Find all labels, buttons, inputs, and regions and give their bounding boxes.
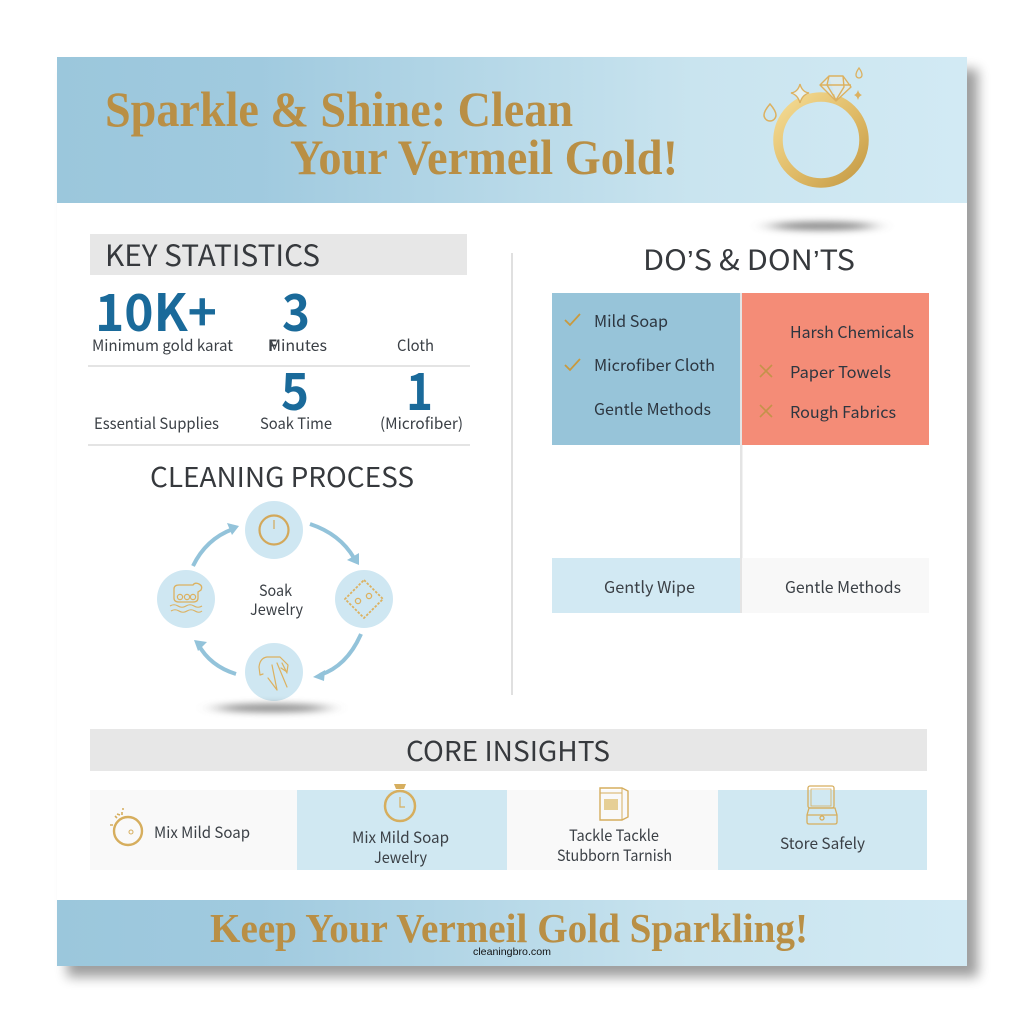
center label: soak jewelry [250, 579, 303, 620]
cross icon [760, 365, 772, 377]
stat: 3 minutes: 3 [282, 272, 310, 346]
center label: soak jewelry: Jewelry [250, 598, 303, 620]
panel: do's and don'ts [552, 239, 929, 613]
icon: gold ring with diamond [764, 68, 864, 183]
stat: 10K+: Minimum gold karat [92, 334, 233, 356]
step: hand wiping [245, 643, 303, 701]
card background [57, 57, 967, 966]
insight: mix mild soap [90, 790, 297, 870]
heading: cleaning process: CLEANING PROCESS [150, 455, 414, 495]
center label: soak jewelry: Soak [259, 579, 292, 601]
panel: cleaning process [150, 455, 414, 712]
card shadow [67, 69, 978, 977]
ring shadow [770, 222, 874, 230]
insight: mix mild soap: Mix Mild Soap [154, 821, 250, 843]
stat: 3 minutes: F [268, 334, 277, 356]
cell: gently wipe: Gently Wipe [604, 574, 695, 598]
insight: tackle stubborn tarnish: Tackle Tackle [569, 824, 659, 846]
icon: stopwatch [385, 784, 415, 821]
item: mild soap: Mild Soap [594, 308, 668, 332]
stat: 1 microfiber [380, 351, 463, 434]
stat: 1 microfiber: (Microfiber) [380, 412, 463, 434]
heading: core insights: CORE INSIGHTS [406, 729, 610, 769]
insight: mix mild soap jewelry: Jewelry [374, 846, 427, 868]
stat: 1 microfiber: 1 [406, 351, 433, 425]
stat: 5 soak time [260, 351, 332, 434]
stat: 3 minutes [268, 272, 327, 356]
step: soak bowl [157, 570, 215, 628]
stat: 10K+: 10K+ [95, 272, 217, 346]
panel: key statistics [88, 233, 470, 446]
item: paper towels: Paper Towels [790, 359, 891, 383]
title: Your Vermeil Gold! [290, 129, 678, 185]
check icon [565, 314, 580, 325]
stat: 5 soak time: Soak Time [260, 412, 332, 434]
icon: sparkling ring [110, 809, 142, 845]
stat: 3 minutes: Minutes [268, 334, 327, 356]
heading: key statistics: KEY STATISTICS [105, 233, 320, 275]
heading: key statistics [90, 233, 467, 275]
cell: gently wipe [552, 558, 740, 613]
cell: gentle methods: Gentle Methods [785, 574, 901, 598]
step: cloth [335, 570, 393, 628]
insight: store safely: Store Safely [780, 832, 865, 854]
step: timer [245, 501, 303, 559]
footer headline: Keep Your Vermeil Gold Sparkling! [210, 905, 808, 951]
header banner [57, 57, 967, 203]
check icon [565, 359, 580, 370]
footer banner [57, 900, 967, 966]
heading: do's and don'ts: DO’S & DON ’TS [643, 239, 855, 279]
do's column [552, 293, 740, 445]
icon: polish box [600, 788, 628, 820]
item: rough fabrics: Rough Fabrics [790, 399, 896, 423]
title: Sparkle & Shine: Clean [105, 81, 573, 137]
stat label: cloth: Cloth [397, 334, 434, 356]
cross icon [760, 405, 772, 417]
insight: mix mild soap jewelry [297, 784, 507, 870]
stat: 5 soak time: 5 [281, 351, 309, 425]
item: microfiber cloth: Microfiber Cloth [594, 352, 715, 376]
arrowheads [194, 523, 359, 681]
title [105, 81, 678, 185]
insight: mix mild soap jewelry: Mix Mild Soap [352, 826, 449, 848]
insight: tackle stubborn tarnish: Stubborn Tarnish [557, 844, 672, 866]
process shadow [216, 704, 328, 712]
insight: tackle stubborn tarnish [507, 788, 718, 870]
panel: core insights [90, 729, 927, 870]
heading: core insights [90, 729, 927, 771]
item: gentle methods: Gentle Methods [594, 396, 711, 420]
process arrows [193, 524, 361, 675]
insight: store safely [718, 786, 927, 870]
stat label: essential supplies: Essential Supplies [94, 412, 219, 434]
don'ts column [742, 293, 929, 445]
cell: gentle methods [742, 558, 929, 613]
icon: jewelry box [807, 786, 837, 824]
source credit: cleaningbro.com [473, 946, 551, 958]
item: harsh chemicals: Harsh Chemicals [790, 319, 914, 343]
